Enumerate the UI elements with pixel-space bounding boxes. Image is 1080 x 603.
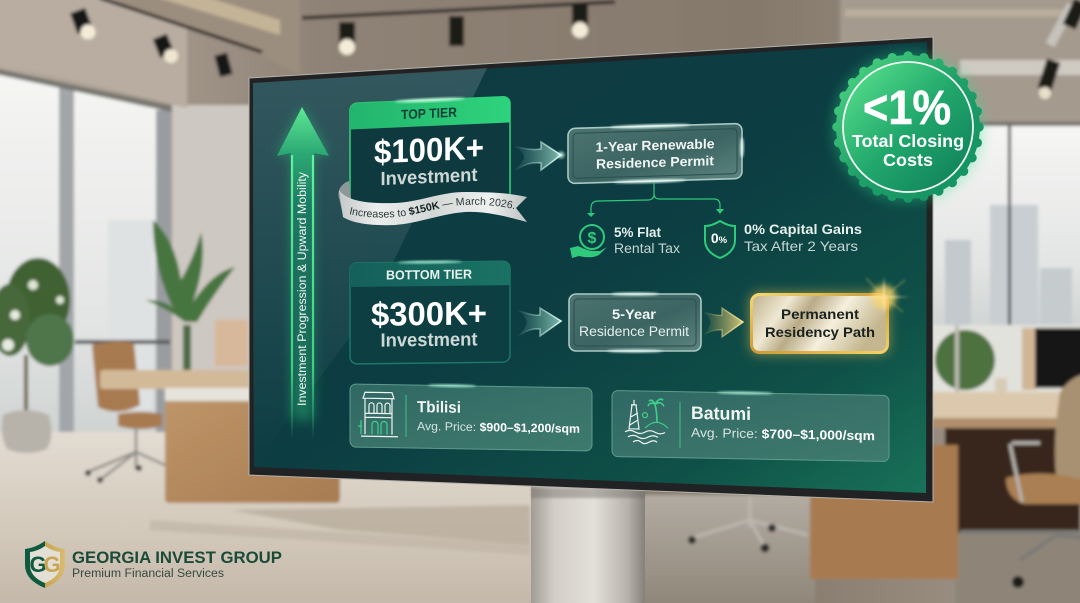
top tier card: TOP TIER: [401, 105, 457, 122]
screen glare: [253, 68, 487, 467]
vertical progression arrow: Investment Progression & Upward Mobility: [297, 172, 309, 406]
icon: Batumi lighthouse and palm: [625, 398, 668, 444]
rental tax benefit: [570, 224, 680, 258]
branch connector: [587, 183, 724, 217]
bottom tier card: Investment: [380, 329, 478, 352]
capital gains benefit: 0% Capital Gains: [744, 221, 862, 237]
top tier card: [338, 96, 527, 226]
monitor bezel: [249, 37, 933, 502]
icon: shield GG: G: [29, 552, 47, 577]
rental tax benefit: 5% Flat: [614, 224, 661, 240]
back plant: [145, 220, 235, 322]
monitor: [248, 36, 934, 502]
arrow: bottom tier to permit: [517, 308, 561, 337]
screen background: [253, 42, 927, 493]
capital gains benefit: Tax After 2 Years: [744, 238, 858, 254]
5-year permit box: [569, 293, 701, 352]
icon: shield GG: [25, 541, 65, 588]
company logo: Premium Financial Services: [72, 568, 224, 580]
permanent residency path box: Residency Path: [765, 324, 875, 340]
city card: Tbilisi: [350, 383, 592, 451]
top tier card: $100K+: [374, 129, 484, 170]
vertical progression arrow: [277, 107, 329, 440]
city card: Tbilisi: Tbilisi: [417, 399, 461, 417]
left windows: [0, 72, 170, 435]
left plant: [24, 355, 28, 415]
monitor pedestal: [531, 485, 645, 603]
company logo: GEORGIA INVEST GROUP: [72, 549, 282, 567]
bottom tier card: [350, 260, 510, 364]
1-year permit box: Residence Permit: [596, 153, 715, 172]
icon: shield 0%: [705, 221, 735, 258]
top tier card: Investment: [380, 165, 478, 190]
1-year permit box: [568, 122, 744, 185]
permanent residency path box: [750, 276, 910, 354]
city card: Tbilisi: Avg. Price: $900–$1,200/sqm: [417, 419, 580, 436]
bottom tier card: $300K+: [371, 294, 487, 333]
city card: Batumi: Avg. Price: $700–$1,000/sqm: [691, 425, 875, 443]
arrow: permit to permanent residency: [703, 308, 743, 337]
right plants and desk: [930, 325, 1080, 395]
company logo: [25, 541, 282, 588]
closing cost badge: <1%: [863, 82, 951, 135]
left soffit: [0, 0, 187, 108]
icon: gold sparkle: [862, 276, 910, 314]
desk and chair: [215, 320, 248, 366]
ribbon note: [338, 181, 527, 226]
arrow: top tier to permit: [514, 142, 564, 171]
bottom tier card: BOTTOM TIER: [386, 267, 473, 283]
rental tax benefit: Rental Tax: [614, 240, 680, 256]
floor: [0, 432, 540, 603]
closing cost badge: Total Closing: [852, 131, 964, 151]
icon: shield 0%: 0%: [711, 230, 728, 246]
permanent residency path box: Permanent: [781, 306, 859, 322]
icon: shield GG: G: [43, 552, 61, 577]
right windows: [930, 125, 1080, 330]
closing cost badge: Costs: [883, 150, 933, 170]
1-year permit box: 1-Year Renewable: [596, 136, 715, 155]
ceiling lights: [100, 0, 615, 52]
icon: dollar in hand: $: [588, 230, 597, 247]
5-year permit box: Residence Permit: [579, 324, 689, 339]
city card: Batumi: [612, 389, 889, 462]
5-year permit box: 5-Year: [612, 307, 657, 322]
icon: Tbilisi building: [358, 392, 398, 437]
city card: Batumi: Batumi: [691, 403, 751, 424]
closing cost badge: [832, 51, 984, 203]
ribbon note: Increases to $150K — March 2026.: [350, 197, 514, 218]
capital gains benefit: [705, 221, 862, 258]
back wall: [172, 105, 262, 435]
